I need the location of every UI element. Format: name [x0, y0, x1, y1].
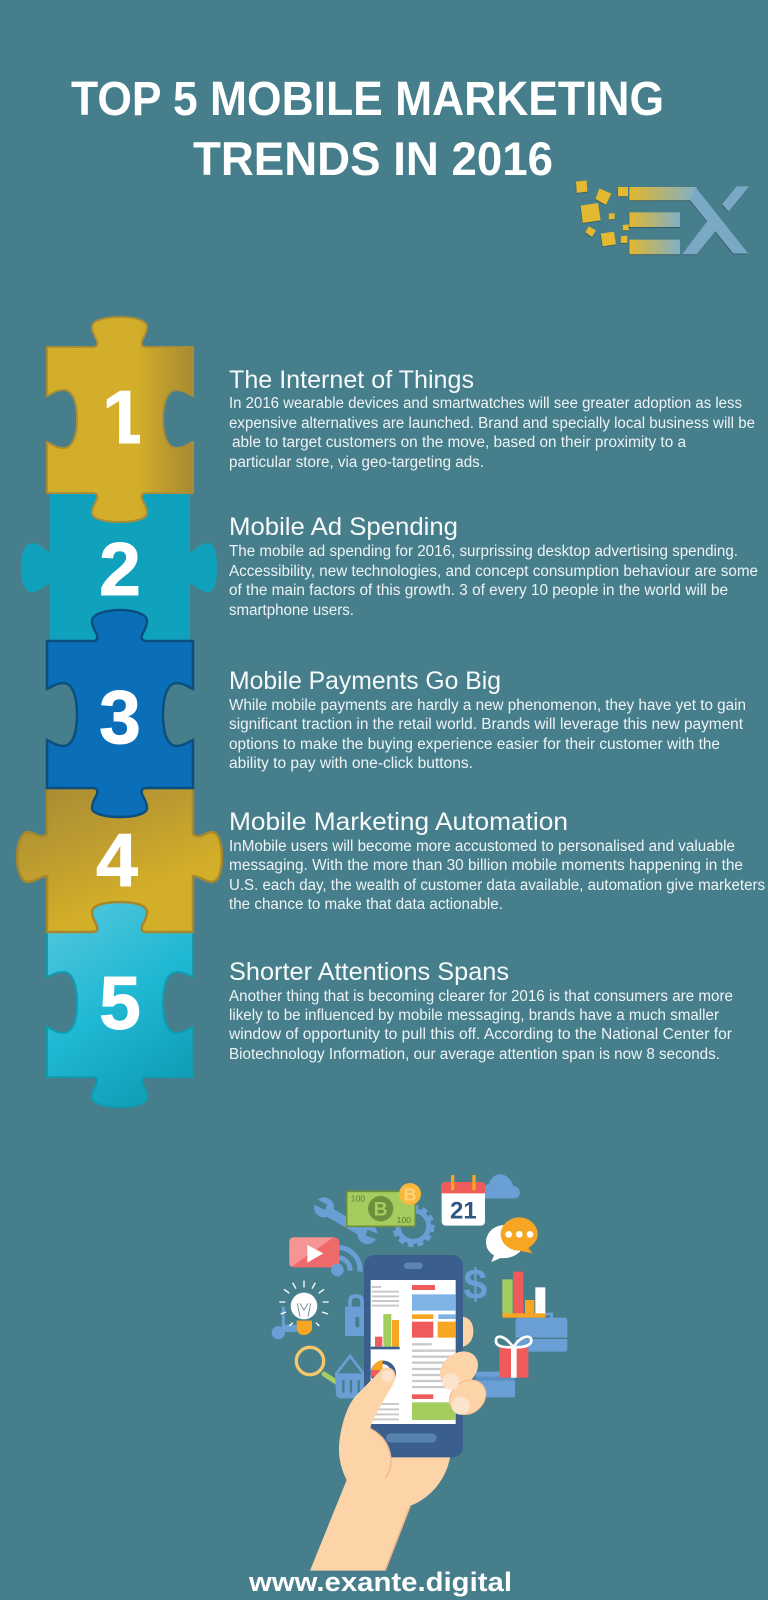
icon: banknote: B: [403, 1185, 416, 1205]
icon: banknote: 100: [351, 1194, 365, 1204]
phone: [364, 1255, 463, 1457]
text block 5: Shorter Attentions Spans: Biotechnology Information, our average attention span is now 8 seconds.: [229, 1046, 720, 1063]
icon: bar chart: [502, 1272, 545, 1318]
screen: mini bar chart: [371, 1314, 400, 1349]
text block 2: Mobile Ad Spending: of the main factors of this growth. 3 of every 10 people in the world will be: [229, 582, 728, 599]
text block 5: Shorter Attentions Spans: [228, 958, 733, 1063]
puzzle piece 2: [21, 493, 217, 641]
title: TRENDS IN 2016: [193, 132, 553, 185]
icon: magnifier: [296, 1347, 339, 1384]
illustration: hand holding phone with marketing icons: [272, 1174, 567, 1571]
finger behind phone: [460, 1317, 473, 1347]
text block 1: The Internet of Things: In 2016 wearable devices and smartwatches will see greater adoption as less: [229, 395, 742, 412]
icon: chat bubbles: [486, 1217, 538, 1262]
text block 4: Mobile Marketing Automation: messaging. With the more than 30 billion mobile moments happening in the: [229, 857, 743, 874]
text block 1: The Internet of Things: The Internet of Things: [229, 366, 474, 394]
text block 3: Mobile Payments Go Big: ability to pay with one-click buttons.: [229, 755, 473, 772]
icon: padlock: [345, 1296, 366, 1336]
text block 5: Shorter Attentions Spans: Another thing that is becoming clearer for 2016 is that consumers are more: [229, 988, 733, 1005]
icon: light bulb with music note: [272, 1281, 329, 1339]
text block 2: Mobile Ad Spending: Mobile Ad Spending: [229, 513, 458, 541]
puzzle piece 1: [47, 317, 193, 522]
title: TOP 5 MOBILE MARKETING: [71, 73, 664, 126]
text block 4: Mobile Marketing Automation: [229, 808, 765, 913]
icon: banknote: [347, 1183, 421, 1226]
icon: calendar: 21: [450, 1197, 477, 1224]
icon: calendar: [442, 1175, 485, 1226]
puzzle piece 3: 3: [99, 675, 141, 759]
text block 3: Mobile Payments Go Big: significant traction in the retail world. Brands will leverage this new payment: [229, 716, 744, 733]
screen: right column blocks: [412, 1285, 456, 1420]
text block 4: Mobile Marketing Automation: U.S. each day, the wealth of customer data available, automation give marketers: [229, 877, 765, 894]
icon: gift box: [496, 1337, 531, 1378]
footer url: www.exante.digital: [248, 1567, 512, 1597]
icon: video play: [289, 1237, 339, 1267]
phone screen: [371, 1280, 456, 1424]
puzzle piece 5: [47, 902, 193, 1107]
screen: left text lines: [372, 1287, 399, 1419]
text block 1: The Internet of Things: expensive alternatives are launched. Brand and specially local business will be: [229, 415, 755, 432]
icon: wrench: [313, 1197, 379, 1244]
text block 2: Mobile Ad Spending: Accessibility, new technologies, and concept consumption behaviour are some: [229, 563, 758, 580]
text block 5: Shorter Attentions Spans: window of opportunity to pull this off. According to the National Center for: [228, 1026, 732, 1043]
icon: banknote: 100: [397, 1215, 411, 1225]
icon: wifi: [331, 1247, 360, 1276]
text block 4: Mobile Marketing Automation: Mobile Marketing Automation: [229, 808, 568, 836]
text block 1: The Internet of Things: [229, 366, 755, 471]
hand: [310, 1344, 493, 1571]
puzzle piece 1: 1: [102, 375, 144, 459]
icon: basket: [335, 1356, 365, 1398]
puzzle piece 2: 2: [99, 527, 141, 611]
puzzle piece 4: [17, 788, 222, 932]
text block 5: Shorter Attentions Spans: Shorter Attentions Spans: [229, 958, 509, 986]
icon: banknote: B: [374, 1200, 388, 1221]
text block 2: Mobile Ad Spending: smartphone users.: [229, 602, 354, 619]
text block 3: Mobile Payments Go Big: [229, 667, 746, 772]
text block 5: Shorter Attentions Spans: likely to be influenced by mobile messaging, brands have a much smaller: [229, 1007, 719, 1024]
icon: credit card: [476, 1372, 515, 1397]
text block 3: Mobile Payments Go Big: options to make the buying experience easier for their customer with the: [229, 736, 720, 753]
icon: gear: [394, 1207, 433, 1245]
text block 2: Mobile Ad Spending: [229, 513, 758, 619]
icon: cloud: [482, 1174, 520, 1198]
text block 4: Mobile Marketing Automation: the chance to make that data actionable.: [229, 896, 503, 913]
logo: EX: [576, 180, 749, 254]
icon: dollar sign: $: [463, 1261, 487, 1309]
text block 4: Mobile Marketing Automation: InMobile users will become more accustomed to personalised and valuable: [229, 838, 735, 855]
text block 3: Mobile Payments Go Big: Mobile Payments Go Big: [229, 667, 501, 695]
text block 2: Mobile Ad Spending: The mobile ad spending for 2016, surprissing desktop advertising spending.: [229, 543, 738, 560]
puzzle piece 4: 4: [96, 818, 138, 902]
text block 3: Mobile Payments Go Big: While mobile payments are hardly a new phenomenon, they have yet to gain: [229, 697, 746, 714]
puzzle piece 3: [47, 610, 193, 817]
text block 1: The Internet of Things: particular store, via geo-targeting ads.: [229, 454, 484, 471]
text block 1: The Internet of Things: able to target customers on the move, based on their proximity to a: [232, 434, 686, 451]
title: [71, 73, 664, 185]
puzzle piece 5: 5: [99, 961, 141, 1045]
screen: pie chart: [371, 1360, 396, 1386]
icon: briefcase: [516, 1314, 567, 1352]
